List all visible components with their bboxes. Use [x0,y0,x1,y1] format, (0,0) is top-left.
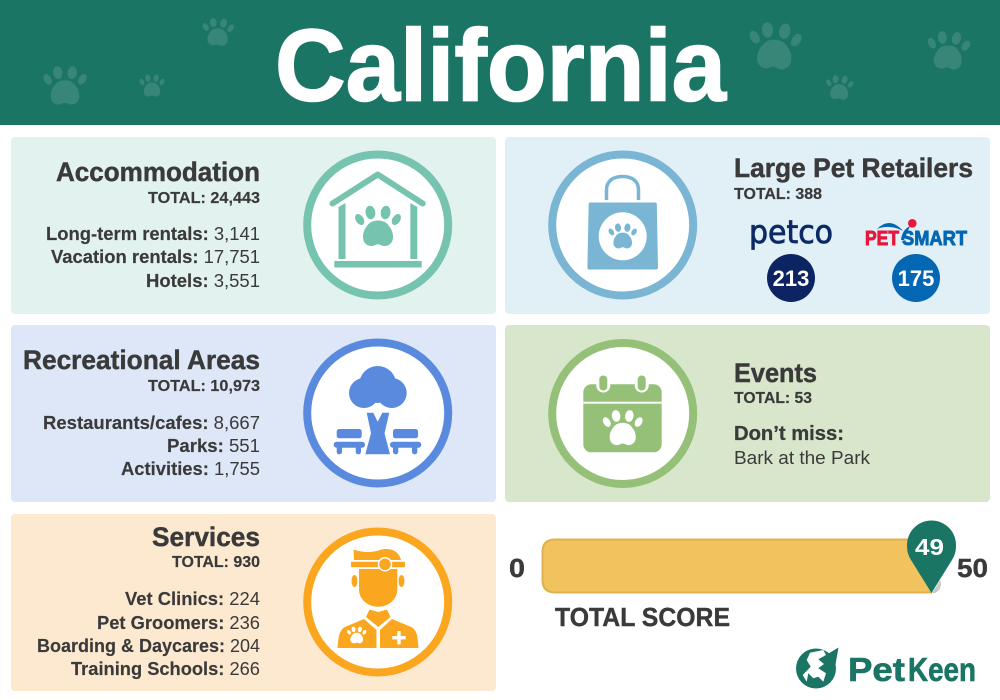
logo: petsmart: PET [865,228,899,250]
heading: events: Events [734,358,817,388]
list: accommodation: Vacation rentals: 17,751 [51,247,260,267]
heading: recreational areas: Recreational Areas [23,345,260,375]
total: services: TOTAL: 930 [172,554,260,571]
list: accommodation: Hotels: 3,551 [146,271,260,291]
list: services: Training Schools: 266 [71,659,260,679]
icon: tree and benches [307,342,448,484]
logo: petco: petco [749,213,833,251]
list: recreational areas: Parks: 551 [167,436,260,456]
heading: services: Services [152,522,260,552]
score maximum: 50 [957,553,988,583]
panel: large pet retailers [505,137,990,314]
logo: petsmart [865,219,967,250]
header banner [0,0,1000,125]
count: petsmart: 175 [898,266,934,291]
icon: veterinarian [307,532,448,672]
count: petco: 213 [773,266,809,291]
count: petco [767,254,815,302]
list: recreational areas [43,413,260,479]
score pin: 49 [915,534,944,560]
total: events: TOTAL: 53 [734,390,812,407]
panel: events [505,325,990,502]
list: recreational areas: Activities: 1,755 [121,459,260,479]
logo: petsmart: SMART [902,228,967,250]
panel: services [11,514,496,691]
heading: large pet retailers: Large Pet Retailers [734,153,973,183]
list: services: Vet Clinics: 224 [125,589,260,609]
score minimum: 0 [509,553,525,583]
event name: Bark at the Park [734,448,871,468]
score label: TOTAL SCORE [555,602,730,632]
total: accommodation: TOTAL: 24,443 [148,190,260,207]
list: services: Pet Groomers: 236 [97,613,260,633]
icon: calendar [552,343,693,484]
count: petsmart [892,254,940,302]
total: retailers: TOTAL: 388 [734,186,822,203]
panel: accommodation [11,137,496,314]
icon: shopping bag [552,154,693,296]
title: California [275,8,727,122]
score bar [542,540,931,592]
list: recreational areas: Restaurants/cafes: 8,667 [43,413,260,433]
logo: pet keen [796,648,976,688]
list: accommodation [46,224,260,291]
subheading: don't miss: Don’t miss: [734,423,844,445]
list: services [37,589,260,679]
icon: dog house [307,154,448,296]
total: recreational areas: TOTAL: 10,973 [148,378,260,395]
heading: accommodation: Accommodation [56,157,260,187]
score gauge [509,520,988,632]
panel: recreational areas [11,325,496,502]
list: accommodation: Long-term rentals: 3,141 [46,224,260,244]
logo mark [796,648,838,688]
background paw prints [41,17,973,104]
logo wordmark: Keen [908,651,976,688]
score pin [907,520,956,593]
logo wordmark: Pet [848,651,905,688]
list: services: Boarding & Daycares: 204 [37,636,260,656]
score bar remainder [932,580,941,593]
logo wordmark [848,651,976,688]
